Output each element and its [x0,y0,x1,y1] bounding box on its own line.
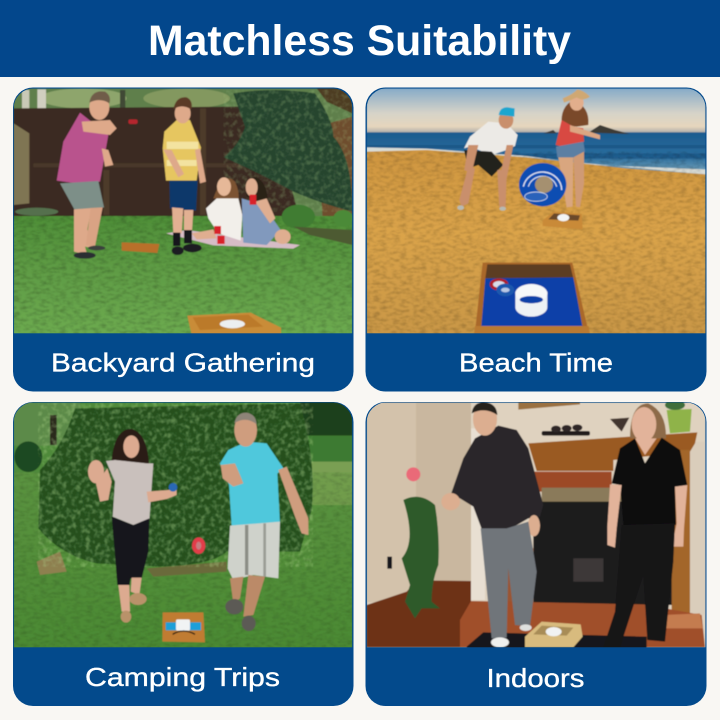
man in pink shirt [57,91,138,259]
green vase plant [665,400,692,433]
panel: backyard gathering [13,88,354,392]
far target box [122,242,159,253]
target box [162,612,205,642]
seated woman [242,177,291,245]
floor mat [467,632,647,648]
title: Matchless Suitability [148,17,571,65]
near target box with rings [474,263,590,335]
photo: camping [14,402,352,649]
near target box [187,313,281,335]
far target box [543,212,583,229]
woman in hat [556,89,600,207]
blanket [166,230,300,249]
panel: beach time [366,88,706,392]
flying red ring [192,537,205,554]
flying pink ring [406,467,420,481]
target box [525,622,583,647]
flying blue disc [519,163,566,206]
woman in black [603,403,687,647]
photo: backyard [14,88,353,336]
man in black shirt [441,402,543,647]
potted vine plant [387,497,440,618]
man in blue tee [220,413,308,631]
panel: indoors [366,400,706,706]
photo: beach [367,88,706,335]
mantel shelf and fireplace [460,418,705,647]
large bush [38,403,313,567]
panel: camping trips [13,402,354,706]
seated girl [192,177,242,244]
caption: camping trips: Camping Trips [85,662,280,692]
caption: beach time: Beach Time [459,348,613,378]
header banner [0,0,720,77]
man in cap [457,107,518,211]
photo: living room [367,400,706,649]
woman in grey top [88,429,177,623]
boy in yellow shirt [163,97,206,255]
caption: backyard gathering: Backyard Gathering [51,348,315,378]
caption: indoors: Indoors [486,663,584,693]
